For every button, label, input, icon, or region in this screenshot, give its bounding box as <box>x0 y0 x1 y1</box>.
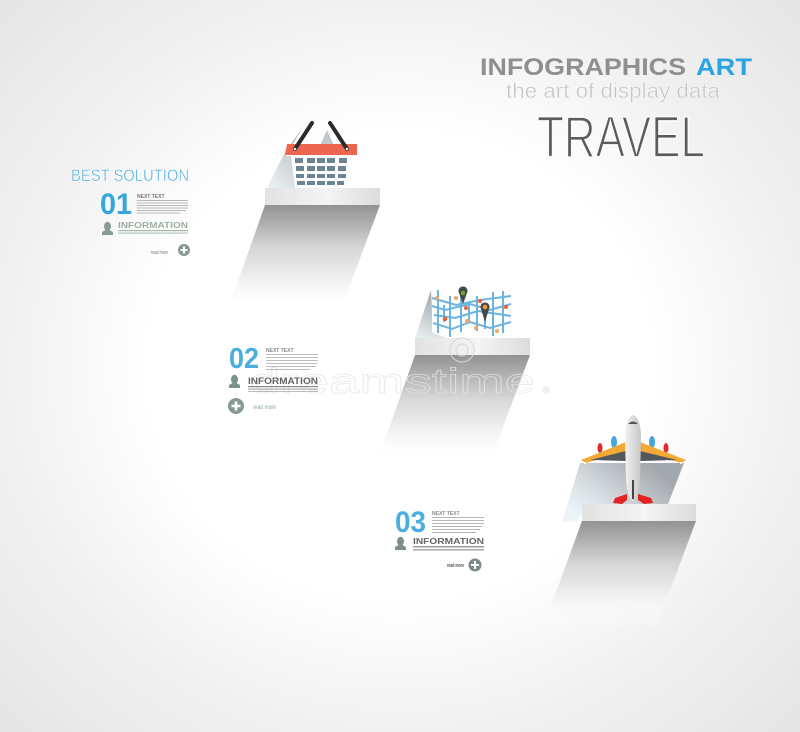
number 01: 01 <box>100 188 132 221</box>
tail <box>613 494 627 504</box>
icon shadow <box>267 127 303 188</box>
text lines: NEXT TEXT <box>266 348 294 354</box>
shelf 3 with plane <box>543 415 696 628</box>
heading: infographics art <box>480 54 752 81</box>
long shadow <box>227 205 380 312</box>
subheading: INFORMATION <box>413 537 484 546</box>
icon: person <box>395 537 406 550</box>
number 02: 02 <box>229 343 259 375</box>
icon: person <box>229 375 240 388</box>
read more: read more <box>151 250 168 256</box>
subheading: INFORMATION <box>248 376 318 386</box>
info block 03 <box>395 506 484 572</box>
number 03: 03 <box>395 506 426 539</box>
heading: infographics art: ART <box>696 54 752 81</box>
watermark <box>250 338 550 401</box>
info block 02 <box>228 343 318 414</box>
long shadow <box>377 355 530 462</box>
icon: plus <box>468 558 482 572</box>
read more: read more <box>253 405 277 411</box>
long shadow <box>543 521 696 628</box>
icon shadow between handles <box>318 130 336 150</box>
shelf 2 with map <box>377 286 530 462</box>
icon shadow <box>562 463 684 522</box>
wings <box>581 442 626 463</box>
info block 01 <box>71 166 190 256</box>
icon: map <box>432 286 511 337</box>
shelf <box>415 338 530 355</box>
icon: plane <box>581 415 686 504</box>
watermark: dreamstime <box>250 362 535 401</box>
shelf 1 with basket <box>227 123 380 312</box>
icon: plus <box>178 244 190 256</box>
icon: plus <box>228 398 244 414</box>
subtitle: the art of display data <box>506 80 720 103</box>
text lines: NEXT TEXT <box>137 194 165 200</box>
read more: read more <box>447 563 464 569</box>
engines <box>598 436 668 453</box>
shelf <box>582 504 696 521</box>
icon: basket <box>285 123 357 188</box>
heading: best solution: BEST SOLUTION <box>71 166 189 185</box>
subheading: INFORMATION <box>118 221 188 230</box>
heading: infographics art: INFOGRAPHICS <box>480 54 686 81</box>
title block <box>480 54 752 170</box>
icon: person <box>102 222 113 235</box>
title: travel: TRAVEL <box>537 105 705 170</box>
fuselage <box>625 415 641 502</box>
shelf <box>265 188 380 205</box>
icon shadow <box>415 290 446 338</box>
text lines: NEXT TEXT <box>432 511 460 517</box>
